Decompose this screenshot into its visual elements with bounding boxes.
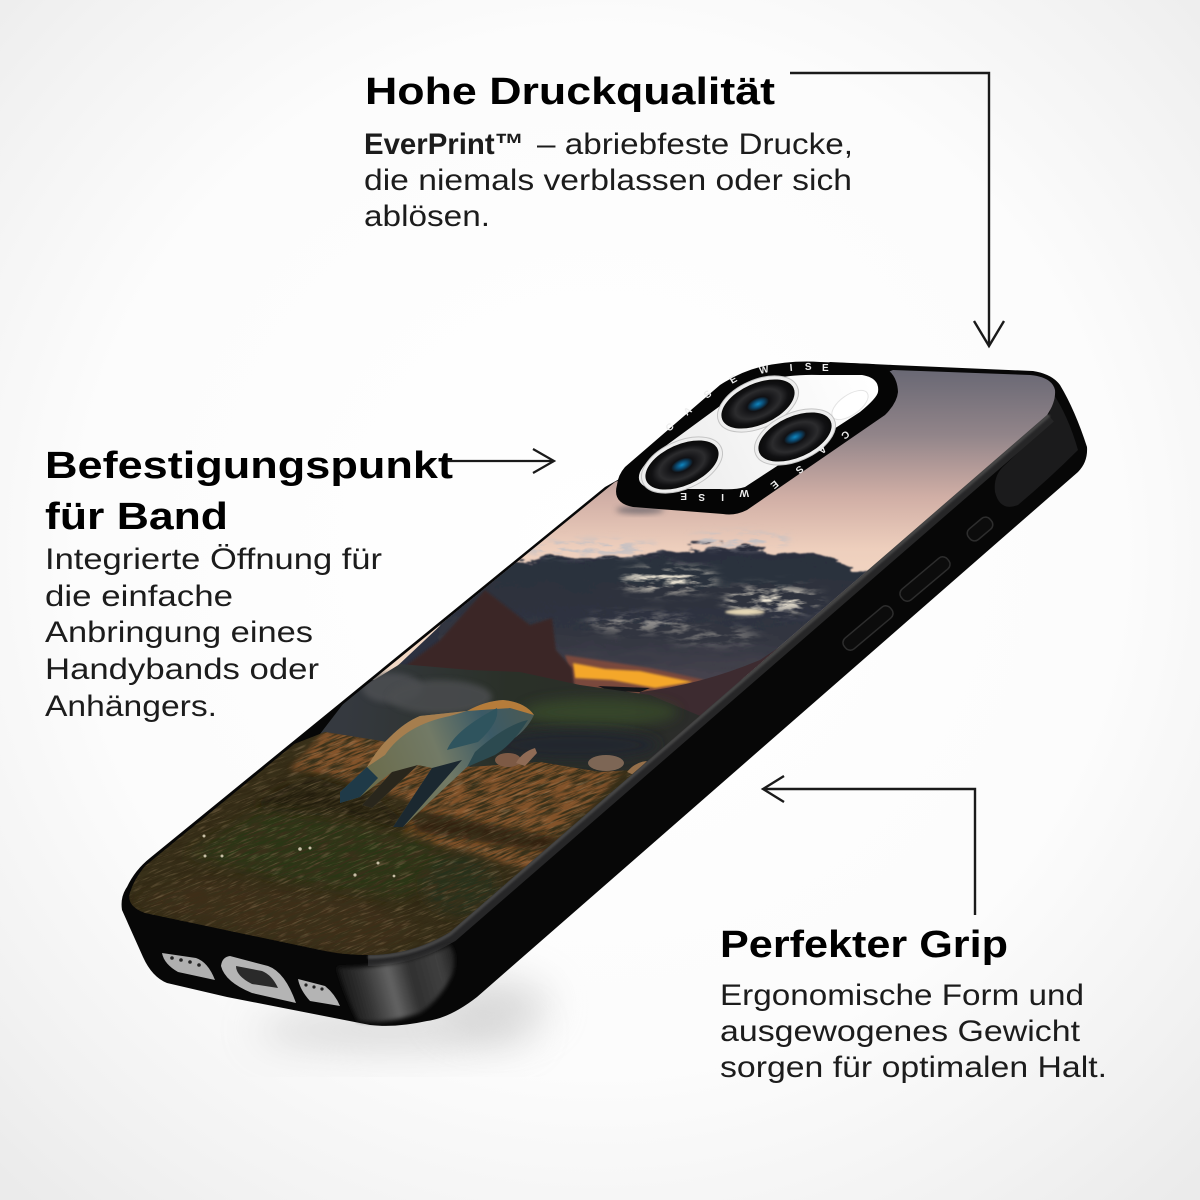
green grass bbox=[202, 810, 442, 896]
text block: ablösen. bbox=[364, 200, 490, 233]
text block: Ergonomische Form und bbox=[720, 979, 1084, 1012]
brown lower grass bbox=[158, 884, 403, 948]
arrow: bottom right bbox=[763, 776, 975, 915]
charging port bbox=[221, 956, 296, 1003]
lens left bbox=[633, 426, 731, 504]
heading: Perfekter Grip bbox=[720, 924, 1008, 966]
phone case bbox=[122, 362, 1087, 1026]
heading: für Band bbox=[45, 496, 228, 538]
text block: Integrierte Öffnung für bbox=[45, 543, 382, 576]
dark stripe bbox=[405, 808, 560, 852]
flash bbox=[827, 385, 873, 425]
bezel band bbox=[368, 417, 1050, 960]
arrow: left bbox=[447, 449, 554, 473]
heading: Befestigungspunkt bbox=[45, 445, 453, 487]
phone shadow bbox=[255, 979, 550, 1048]
text block: EverPrint™ bbox=[364, 128, 524, 161]
small animals bbox=[495, 748, 647, 775]
text block: Handybands oder bbox=[45, 653, 319, 686]
speaker left bbox=[162, 953, 215, 980]
orange upper band bbox=[290, 730, 625, 812]
grass texture dark bbox=[129, 732, 624, 955]
grass texture tan bbox=[130, 732, 632, 955]
corner metallic highlight bbox=[337, 945, 455, 1022]
lens window bbox=[639, 375, 878, 489]
text block bbox=[720, 979, 1107, 1084]
sunset bbox=[565, 655, 705, 696]
bump frame bbox=[616, 362, 898, 514]
elephant bbox=[340, 700, 534, 827]
speaker right bbox=[298, 979, 340, 1006]
text block: ausgewogenes Gewicht bbox=[720, 1015, 1080, 1048]
bezel highlight bbox=[368, 415, 1049, 957]
arrow: top right bbox=[790, 73, 1004, 346]
case body bbox=[122, 362, 1087, 1026]
callout: Befestigungspunkt bbox=[45, 445, 453, 723]
right hill bbox=[640, 648, 778, 716]
mountain bbox=[406, 590, 576, 684]
case artwork bbox=[129, 370, 1056, 955]
text block: die einfache bbox=[45, 580, 233, 613]
side buttons bbox=[841, 515, 995, 653]
text block: die niemals verblassen oder sich bbox=[364, 164, 852, 197]
brand ring top: CASEWISE bbox=[664, 362, 829, 434]
field bbox=[129, 732, 637, 955]
orange lower band bbox=[400, 770, 590, 870]
clouds bbox=[398, 504, 868, 680]
dark shadow band bbox=[255, 775, 420, 835]
forest bbox=[320, 664, 700, 772]
text block: Anhängers. bbox=[45, 690, 217, 723]
field base bbox=[129, 732, 632, 955]
side grip highlight bbox=[995, 392, 1078, 507]
heading: Hohe Druckqualität bbox=[365, 71, 775, 113]
camera bump bbox=[616, 362, 898, 514]
callout: Perfekter Grip bbox=[720, 924, 1107, 1084]
callout: Hohe Druckqualität bbox=[364, 71, 853, 233]
text block bbox=[45, 543, 382, 723]
brand ring right: CASE bbox=[768, 428, 851, 491]
text block bbox=[364, 128, 853, 233]
green grass right bbox=[422, 855, 498, 915]
text block: Anbringung eines bbox=[45, 616, 313, 649]
heading bbox=[45, 445, 453, 538]
lens right bbox=[746, 398, 844, 476]
brand ring bottom: WISE bbox=[680, 487, 749, 502]
text block: – abriebfeste Drucke, bbox=[537, 128, 853, 161]
flower specks bbox=[202, 834, 395, 877]
sky bbox=[372, 370, 1056, 680]
lens top bbox=[709, 365, 807, 443]
text block: sorgen für optimalen Halt. bbox=[720, 1051, 1107, 1084]
